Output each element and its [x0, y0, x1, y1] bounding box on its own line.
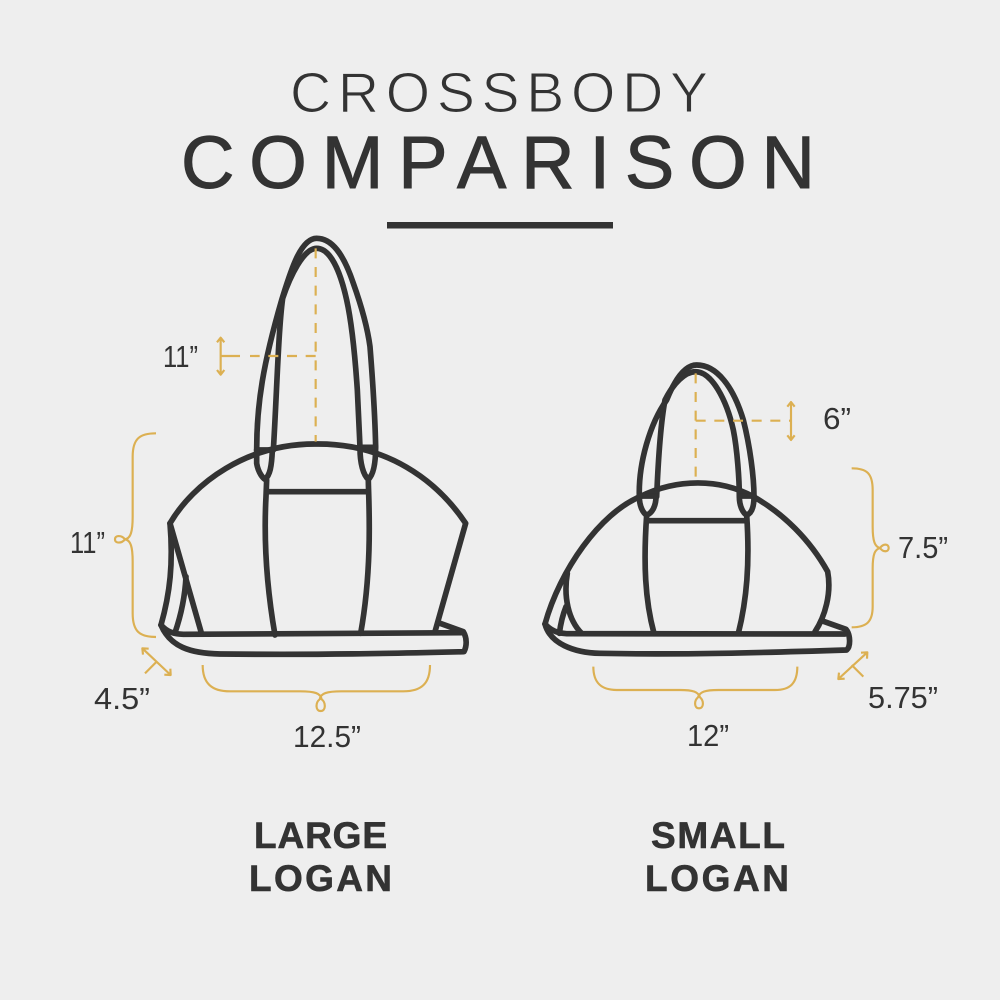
small bag dimension lines	[593, 373, 889, 708]
large bag labels: 11”	[70, 525, 105, 560]
small logan name: SMALL	[651, 815, 785, 856]
small bag labels: 5.75”	[868, 680, 938, 715]
large bag dimension lines	[115, 248, 430, 711]
small bag labels	[687, 401, 948, 753]
large logan name: LARGE	[254, 815, 387, 856]
small bag labels: 7.5”	[898, 530, 948, 565]
large bag labels: 11”	[163, 339, 198, 374]
large bag labels: 4.5”	[94, 681, 150, 716]
small bag outline	[545, 365, 850, 654]
large bag outline	[161, 238, 466, 654]
panel: large logan	[70, 238, 466, 899]
large logan name: LOGAN	[249, 858, 392, 899]
title	[181, 61, 815, 228]
small logan name: LOGAN	[645, 858, 789, 899]
large bag labels: 12.5”	[293, 719, 361, 754]
panel: small logan	[545, 365, 948, 899]
large logan name	[249, 815, 392, 899]
small bag labels: 6”	[823, 401, 851, 436]
title line: comparison: COMPARISON	[181, 121, 815, 204]
large bag labels	[70, 339, 361, 754]
title line: crossbody: CROSSBODY	[290, 61, 708, 125]
title underline	[387, 222, 613, 228]
small bag labels: 12”	[687, 718, 729, 753]
small logan name	[645, 815, 789, 899]
